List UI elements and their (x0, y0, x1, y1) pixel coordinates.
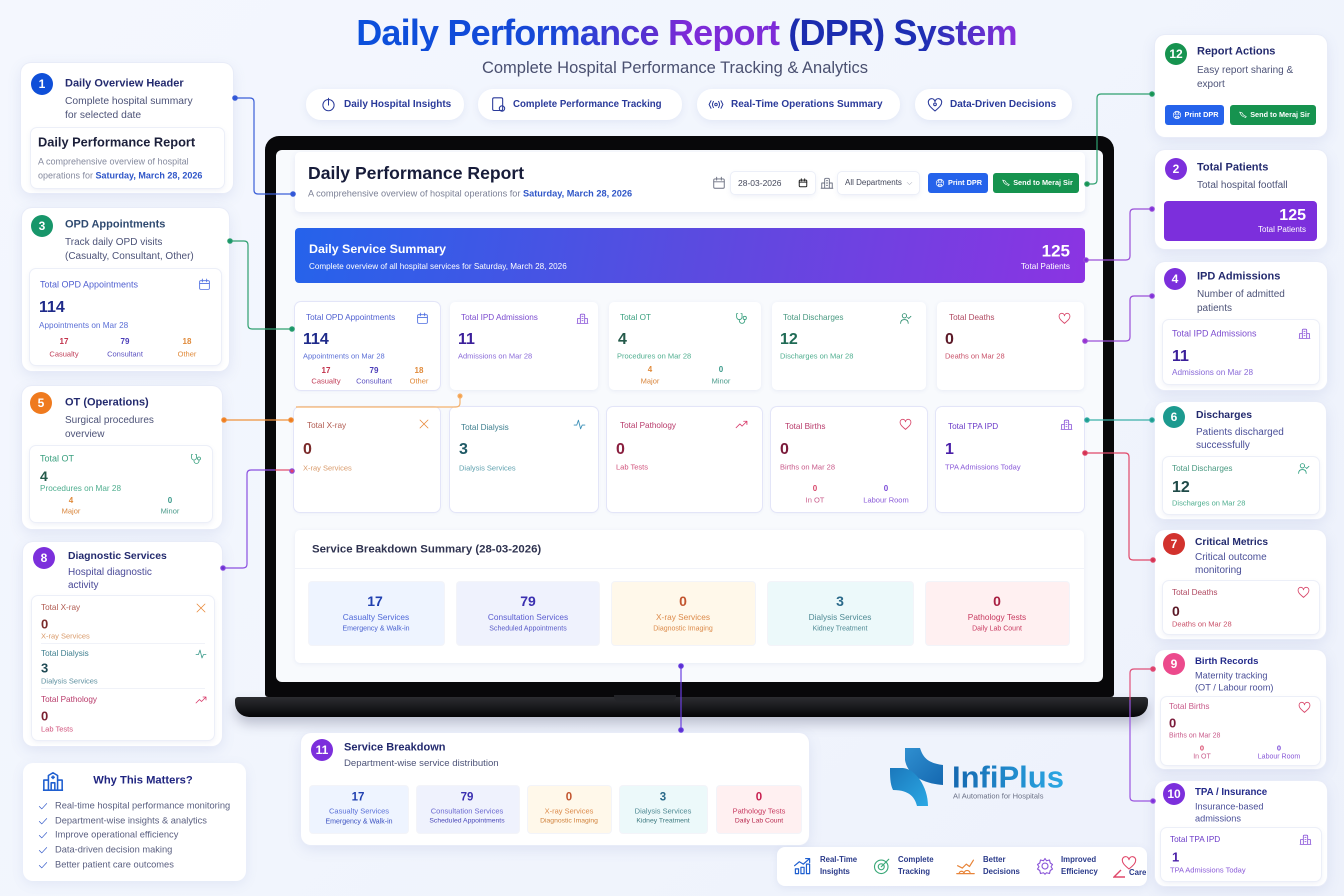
panel: report header (295, 152, 1085, 212)
arrow: 4 to IPD (1083, 294, 1154, 343)
mini diagnostics card: Total Pathology (41, 695, 97, 704)
department select: All Departments (845, 178, 902, 187)
mini tile: casualty: 17 (352, 791, 364, 803)
mini TPA card: 1 (1172, 850, 1179, 864)
breakdown tile: x-ray: Diagnostic Imaging (653, 626, 713, 632)
breakdown tile: casualty: Emergency & Walk-in (342, 626, 410, 632)
callout 2: total patients: Total Patients (1197, 162, 1268, 174)
mini discharges card: 12 (1172, 479, 1190, 496)
chip: data-driven decisions: Data-Driven Decisions (950, 99, 1056, 110)
mini discharges card: Discharges on Mar 28 (1172, 498, 1245, 507)
mini discharges card: Total Discharges (1172, 464, 1233, 473)
callout 2: total patients: Total hospital footfall (1197, 180, 1288, 191)
mini OT card: Major (62, 506, 80, 515)
mini tile: consultation: 79 (461, 791, 473, 803)
mini TPA card: TPA Admissions Today (1170, 865, 1246, 874)
arrow: 5 to OT (222, 418, 293, 422)
callout 12: report actions: 12 (1169, 47, 1183, 61)
benefit: complete tracking (874, 855, 934, 876)
icon: logo cross (890, 748, 943, 806)
mini diagnostics card: X-ray Services (41, 631, 90, 640)
logo wordmark: InfiPlus (952, 760, 1064, 794)
callout 3: OPD appointments: OPD Appointments (65, 218, 165, 230)
benefits list (38, 800, 230, 870)
chip: data-driven decisions (915, 89, 1072, 120)
mini tile: x-ray: X-ray Services (545, 806, 593, 815)
mini deaths card (1163, 581, 1319, 634)
mini tile: x-ray: 0 (566, 791, 572, 803)
mini diagnostics card: 3 (41, 660, 48, 676)
mini diagnostics card: 0 (41, 616, 48, 632)
stat card: OPD: Appointments on Mar 28 (303, 351, 385, 360)
report title: Daily Performance Report (308, 163, 524, 183)
mini OPD card: Appointments on Mar 28 (39, 321, 128, 330)
chip: complete performance tracking (478, 89, 682, 120)
stat card: discharges (772, 302, 926, 390)
stat card: discharges: Total Discharges (783, 313, 844, 322)
benefits list: Real-time hospital performance monitoring (55, 800, 230, 810)
chip: daily hospital insights (306, 89, 464, 120)
callout 7: critical metrics: Critical Metrics (1195, 537, 1268, 548)
benefit: better decisions: Decisions (983, 867, 1020, 876)
mini header preview: operations for Saturday, March 28, 2026 (38, 170, 202, 180)
date input: 28-03-2026 (738, 178, 781, 188)
why heading: Why This Matters? (93, 774, 193, 786)
panel: benefits strip (777, 847, 1147, 886)
stat card: births (771, 407, 927, 512)
arrow: 9 to births (1130, 667, 1155, 700)
stat card: OT: Procedures on Mar 28 (617, 351, 691, 360)
mini births card: Births on Mar 28 (1169, 732, 1220, 740)
mini discharges card (1163, 457, 1319, 514)
callout 4: IPD admissions (1155, 262, 1327, 390)
callout 3: OPD appointments: Track daily OPD visits (65, 237, 162, 248)
button: print DPR: Print DPR (948, 178, 982, 187)
total patients tile: Total Patients (1258, 225, 1306, 234)
callout 10: TPA insurance (1155, 781, 1327, 886)
callout 1: daily overview header: Complete hospital summary (65, 96, 193, 107)
callout 5: OT operations: Surgical procedures (65, 415, 154, 426)
chip: daily hospital insights: Daily Hospital Insights (344, 99, 451, 110)
stat card: TPA: TPA Admissions Today (945, 462, 1021, 471)
arrow: OT up link (296, 394, 462, 407)
mini tile: pathology: Daily Lab Count (735, 818, 783, 825)
mini diagnostics card: Lab Tests (41, 724, 73, 733)
chip: real-time operations summary (697, 89, 900, 120)
stat card: IPD: Total IPD Admissions (461, 313, 538, 322)
callout 8: diagnostic services: activity (68, 580, 99, 591)
benefit: real-time insights: Insights (820, 867, 850, 876)
banner total label: Total Patients (1021, 262, 1070, 271)
stat card: births: 0 (813, 484, 817, 493)
stat card: OPD: Casualty (311, 376, 341, 385)
mini OPD card: 17 (60, 337, 68, 346)
callout 4: IPD admissions: patients (1197, 303, 1232, 314)
benefit: complete tracking: Tracking (898, 867, 930, 876)
mini births card: In OT (1193, 754, 1211, 760)
arrow: 1 to header (233, 96, 295, 196)
banner: daily service summary (295, 228, 1085, 283)
breakdown tile: pathology: 0 (993, 593, 1001, 609)
breakdown tile: pathology: Pathology Tests (968, 612, 1026, 622)
callout 11: service breakdown: Department-wise service distribution (344, 758, 499, 769)
breakdown tile: pathology (926, 582, 1069, 645)
laptop (230, 136, 1152, 730)
laptop screen (276, 150, 1103, 682)
benefits list: Department-wise insights & analytics (55, 815, 207, 825)
mini diagnostics card: Total Dialysis (41, 649, 89, 658)
callout 7: critical metrics: Critical outcome (1195, 552, 1267, 563)
button: print DPR (1165, 105, 1224, 125)
breakdown tile: dialysis (768, 582, 913, 645)
stat card: OPD: Total OPD Appointments (306, 313, 395, 322)
arrow: 11 to breakdown (679, 664, 683, 732)
stat card: dialysis: Total Dialysis (461, 423, 509, 432)
mini tile: consultation: Consultation Services (431, 806, 503, 815)
mini OT card: Total OT (40, 454, 74, 464)
stat card: pathology: Lab Tests (616, 462, 648, 471)
arrow: 10 to TPA (1130, 700, 1155, 803)
stat card: deaths: Deaths on Mar 28 (945, 351, 1005, 360)
panel: why this matters (23, 763, 246, 881)
callout 6: discharges: 6 (1171, 410, 1177, 424)
stat card: IPD: 11 (458, 331, 475, 348)
callout 1: daily overview header: 1 (39, 77, 45, 91)
callout 9: birth records (1155, 650, 1326, 769)
callout 10: TPA insurance: admissions (1195, 813, 1241, 823)
callout 4: IPD admissions: IPD Admissions (1197, 270, 1280, 282)
mini tile: pathology (717, 786, 801, 833)
stat card: OPD: Consultant (356, 376, 392, 385)
stat card: TPA: Total TPA IPD (948, 422, 998, 431)
department select (838, 172, 919, 194)
icon: building (820, 178, 834, 189)
breakdown tile: casualty: 17 (367, 593, 383, 609)
callout 4: IPD admissions: Number of admitted (1197, 289, 1285, 300)
stat card: births: Total Births (785, 422, 826, 431)
callout 3: OPD appointments: (Casualty, Consultant, Other) (65, 251, 194, 262)
breakdown heading: Service Breakdown Summary (28-03-2026) (312, 543, 541, 555)
stat card: pathology: 0 (616, 441, 625, 458)
button: send (1230, 105, 1316, 125)
stat card: deaths: 0 (945, 331, 954, 348)
benefit: improved efficiency (1036, 855, 1098, 876)
mini header preview: Daily Performance Report (38, 135, 195, 150)
callout 3: OPD appointments: 3 (39, 219, 45, 233)
mini OPD card: 18 (183, 337, 191, 346)
mini births card: 0 (1200, 743, 1204, 752)
breakdown tile: x-ray (612, 582, 755, 645)
subtitle: Complete Hospital Performance Tracking & Analytics (482, 59, 868, 77)
mini OT card: Minor (161, 506, 179, 515)
callout 5: OT operations: 5 (38, 396, 44, 410)
icon: calendar (713, 176, 725, 189)
mini births card: 0 (1169, 716, 1176, 730)
callout 2: total patients: 2 (1173, 162, 1179, 176)
banner total: 125 (1042, 242, 1070, 260)
stat card: OT: Total OT (620, 313, 651, 322)
stat card: dialysis (450, 407, 598, 512)
stat card: OT: Major (641, 376, 659, 385)
callout 1: daily overview header: Daily Overview Header (65, 78, 184, 90)
callout 11: service breakdown: Service Breakdown (344, 742, 446, 754)
callout 8: diagnostic services: Hospital diagnostic (68, 567, 152, 578)
callout 6: discharges: successfully (1196, 440, 1250, 451)
mini deaths card: Total Deaths (1172, 588, 1218, 597)
stat card: x-ray: X-ray Services (303, 463, 352, 472)
stat card: OT: 4 (648, 365, 652, 374)
arrow: 8 to diagnostics (221, 469, 294, 570)
stat card: discharges: 12 (780, 331, 798, 348)
button: send: Send to Meraj Sir (1250, 110, 1310, 119)
total patients tile: 125 (1279, 207, 1306, 224)
callout 10: TPA insurance: TPA / Insurance (1195, 787, 1267, 798)
date input (731, 172, 815, 194)
callout 1: daily overview header: for selected date (65, 110, 141, 121)
stat card: OPD: 114 (303, 331, 329, 348)
stat card: births: Labour Room (863, 495, 909, 504)
mini OT card: Procedures on Mar 28 (40, 484, 121, 493)
mini tile: dialysis: 3 (660, 791, 666, 803)
report subtitle: A comprehensive overview of hospital operations for Saturday, March 28, 2026 (308, 188, 632, 198)
logo: InfiPlus (890, 748, 1064, 806)
callout 6: discharges (1155, 402, 1326, 519)
arrow: 3 to OPD (228, 239, 294, 331)
stat card: TPA (936, 407, 1084, 512)
benefits list: Improve operational efficiency (55, 829, 178, 839)
total patients tile (1164, 201, 1317, 241)
callout 12: report actions: Report Actions (1197, 46, 1275, 58)
arrow: 12 to actions (1085, 92, 1154, 186)
stat card: OPD: 79 (370, 366, 378, 375)
button: send (993, 173, 1079, 193)
mini OPD card: Consultant (107, 349, 143, 358)
stat card: births: 0 (780, 441, 789, 458)
callout 7: critical metrics (1155, 530, 1326, 639)
breakdown tile: consultation (457, 582, 599, 645)
mini deaths card: 0 (1172, 603, 1180, 619)
callout 9: birth records: Birth Records (1195, 656, 1258, 667)
callout 12: report actions (1155, 35, 1327, 137)
breakdown tile: dialysis: Dialysis Services (809, 612, 871, 622)
breakdown heading rule (295, 568, 1084, 569)
benefit: real-time insights: Real-Time (820, 855, 857, 864)
mini births card (1161, 697, 1320, 765)
callout 9: birth records: 9 (1171, 657, 1177, 671)
button: print DPR: Print DPR (1184, 110, 1219, 119)
mini births card: Total Births (1169, 702, 1210, 711)
mini OPD card: 114 (39, 299, 65, 316)
callout 10: TPA insurance: Insurance-based (1195, 801, 1263, 811)
breakdown tile: pathology: Daily Lab Count (972, 626, 1022, 632)
mini diagnostics card: 0 (41, 708, 48, 724)
stat card: pathology (607, 407, 762, 512)
callout 6: discharges: Patients discharged (1196, 427, 1284, 438)
benefit: care: Care (1129, 868, 1146, 877)
callout 5: OT operations (22, 386, 222, 529)
mini IPD card: Admissions on Mar 28 (1172, 368, 1253, 377)
mini OT card (30, 446, 212, 522)
mini IPD card: 11 (1172, 348, 1189, 365)
stat card: OPD: 18 (415, 366, 423, 375)
panel: service breakdown summary (295, 530, 1084, 663)
stat card: OT: 4 (618, 331, 627, 348)
mini tile: casualty: Emergency & Walk-in (325, 818, 393, 826)
benefit: improved efficiency: Efficiency (1061, 867, 1098, 876)
benefit: real-time insights (794, 855, 857, 876)
benefits list: Better patient care outcomes (55, 859, 174, 869)
logo tagline: AI Automation for Hospitals (953, 791, 1043, 800)
mini OPD card: Total OPD Appointments (40, 280, 138, 290)
mini OT card: 4 (69, 496, 73, 505)
chip: real-time operations summary: Real-Time Operations Summary (731, 99, 883, 110)
stat card: OPD (295, 302, 440, 390)
benefit: complete tracking: Complete (898, 855, 934, 864)
mini tile: consultation: Scheduled Appointments (429, 818, 505, 825)
callout 7: critical metrics: monitoring (1195, 565, 1242, 576)
mini header preview (31, 128, 224, 188)
benefits list: Data-driven decision making (55, 844, 172, 854)
stat card: deaths (937, 302, 1084, 390)
mini births card: 0 (1277, 743, 1281, 752)
mini births card: Labour Room (1258, 754, 1300, 760)
breakdown tile: casualty: Casualty Services (343, 612, 409, 622)
stat card: deaths: Total Deaths (949, 313, 995, 322)
stat card: IPD (450, 302, 598, 390)
mini OPD card: Other (178, 349, 196, 358)
button: print DPR (928, 173, 988, 193)
callout 8: diagnostic services: 8 (41, 551, 47, 565)
callout 4: IPD admissions: 4 (1172, 272, 1178, 286)
breakdown tile: dialysis: Kidney Treatment (813, 626, 867, 632)
benefit: better decisions: Better (983, 855, 1006, 864)
mini OT card: 0 (168, 496, 172, 505)
stat card: x-ray: Total X-ray (307, 421, 346, 430)
mini OT card: 4 (40, 468, 48, 484)
arrow: 2 to total patients (1084, 207, 1154, 262)
breakdown tile: consultation: Scheduled Appointments (489, 626, 567, 632)
breakdown tile: consultation: Consultation Services (488, 612, 568, 622)
benefit: better decisions (956, 855, 1020, 876)
stat card: births: 0 (884, 484, 888, 493)
stat card: births: Births on Mar 28 (780, 462, 835, 471)
mini tile: pathology: Pathology Tests (733, 806, 785, 815)
stat card: OT: 0 (719, 365, 723, 374)
breakdown tile: dialysis: 3 (836, 593, 844, 609)
callout 10: TPA insurance: 10 (1167, 787, 1181, 801)
callout 9: birth records: Maternity tracking (1195, 670, 1268, 680)
mini tile: casualty: Casualty Services (329, 806, 389, 815)
mini tile: x-ray: Diagnostic Imaging (540, 818, 598, 825)
stat card: OPD: Other (410, 376, 428, 385)
stat card: IPD: Admissions on Mar 28 (458, 351, 532, 360)
mini diagnostics card: Dialysis Services (41, 676, 98, 685)
title: Daily Performance Report (DPR) System (356, 12, 1017, 53)
mini deaths card: Deaths on Mar 28 (1172, 619, 1232, 628)
icon: hospital (42, 772, 64, 791)
arrow: 7 to critical (1083, 451, 1155, 562)
mini tile: x-ray (528, 786, 611, 833)
stat card: x-ray (294, 407, 440, 512)
arrow: 6 to discharges (1085, 418, 1154, 422)
callout 12: report actions: Easy report sharing & (1197, 65, 1293, 76)
callout 3: OPD appointments (22, 208, 229, 371)
mini tile: dialysis (620, 786, 707, 833)
breakdown tile: x-ray: X-ray Services (656, 612, 710, 622)
mini tile: casualty (310, 786, 408, 833)
laptop hinge notch (614, 695, 676, 702)
callout 8: diagnostic services: Diagnostic Services (68, 551, 167, 562)
callout 2: total patients (1155, 150, 1327, 249)
banner title: Daily Service Summary (309, 242, 446, 256)
button: send: Send to Meraj Sir (1013, 178, 1073, 187)
stat card: OT: Minor (712, 376, 730, 385)
chip: complete performance tracking: Complete Performance Tracking (513, 99, 662, 110)
callout 9: birth records: (OT / Labour room) (1195, 682, 1273, 692)
callout 1: daily overview header (21, 63, 233, 193)
mini tile: consultation (417, 786, 519, 833)
mini TPA card: Total TPA IPD (1170, 835, 1220, 844)
breakdown tile: consultation: 79 (520, 593, 536, 609)
callout 5: OT operations: overview (65, 429, 104, 440)
breakdown tile: x-ray: 0 (679, 593, 687, 609)
mini IPD card (1163, 320, 1319, 384)
mini diagnostics card: Total X-ray (41, 603, 80, 612)
callout 6: discharges: Discharges (1196, 410, 1252, 421)
mini TPA card (1161, 828, 1321, 881)
banner subtitle: Complete overview of all hospital services for Saturday, March 28, 2026 (309, 262, 567, 271)
benefit: care (1113, 856, 1146, 878)
mini tile: pathology: 0 (756, 791, 762, 803)
mini OPD card: Casualty (49, 349, 79, 358)
callout 11: service breakdown (301, 733, 809, 845)
stat card: births: In OT (806, 495, 824, 504)
mini tile: dialysis: Kidney Treatment (636, 818, 690, 825)
callout 8: diagnostic services (23, 542, 222, 746)
mini tile: dialysis: Dialysis Services (635, 806, 691, 815)
mini OPD card (30, 269, 221, 365)
stat card: OPD: 17 (322, 366, 330, 375)
callout 12: report actions: export (1197, 79, 1225, 90)
laptop bezel (265, 136, 1114, 697)
mini header preview: A comprehensive overview of hospital (38, 156, 189, 166)
stat card: OT (609, 302, 761, 390)
stat card: TPA: 1 (945, 441, 954, 458)
stat card: pathology: Total Pathology (620, 421, 676, 430)
callout 7: critical metrics: 7 (1171, 537, 1177, 551)
mini diagnostics card (32, 596, 214, 740)
callout 11: service breakdown: 11 (316, 743, 328, 757)
mini IPD card: Total IPD Admissions (1172, 328, 1257, 338)
stat card: discharges: Discharges on Mar 28 (780, 351, 853, 360)
breakdown tile: casualty (309, 582, 444, 645)
stat card: x-ray: 0 (303, 441, 312, 458)
benefit: improved efficiency: Improved (1061, 855, 1096, 864)
callout 5: OT operations: OT (Operations) (65, 396, 149, 408)
stat card: dialysis: 3 (459, 441, 468, 458)
stat card: dialysis: Dialysis Services (459, 463, 516, 472)
mini OPD card: 79 (121, 337, 129, 346)
laptop base (235, 697, 1148, 717)
